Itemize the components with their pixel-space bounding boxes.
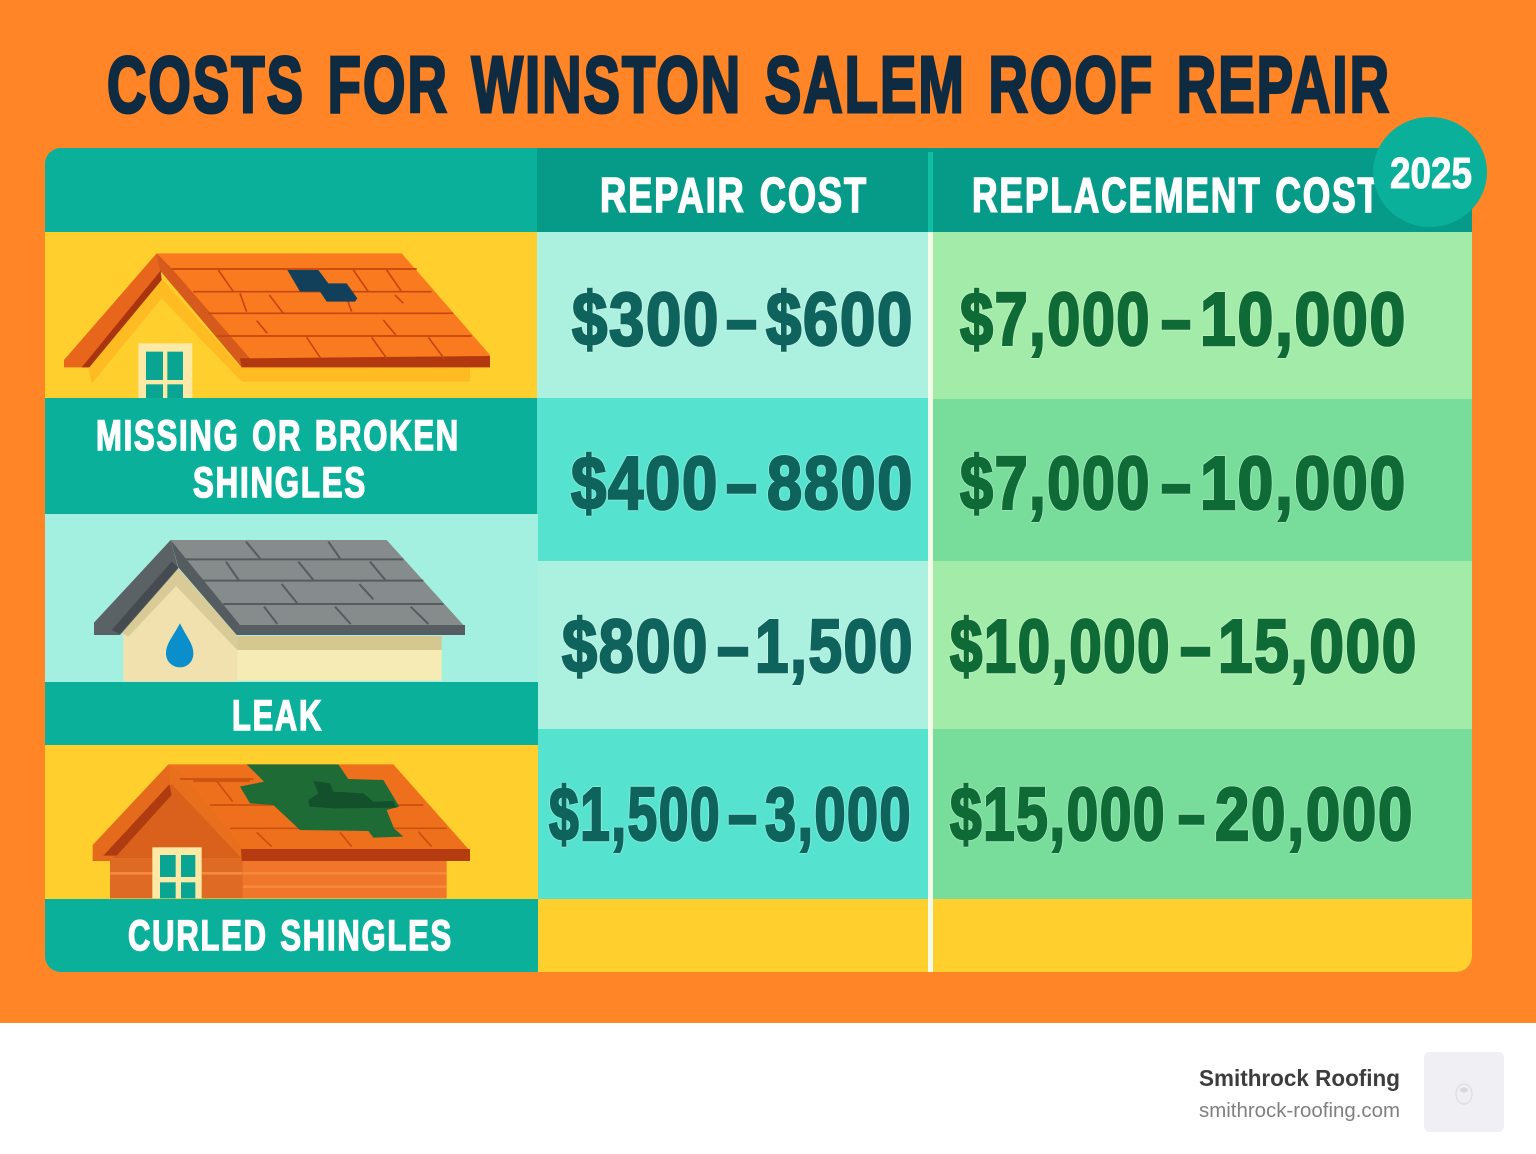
label: leak: LEAK <box>232 692 323 740</box>
value: $7,000–10,000: 10,000 <box>1200 441 1407 525</box>
panel: cost table <box>45 148 1472 972</box>
value: $7,000–10,000: $7,000 <box>960 277 1151 361</box>
value: $15,000–20,000: – <box>1178 772 1205 856</box>
label: curled shingles: CURLED SHINGLES <box>128 912 453 960</box>
value: $400–8800 <box>570 450 912 517</box>
icon: logo tile <box>1424 1052 1504 1132</box>
value: $300–$600: – <box>726 277 757 361</box>
repair cost column backgrounds <box>537 232 928 972</box>
header: repair cost: REPAIR COST <box>600 169 868 223</box>
brand url: smithrock-roofing.com <box>1199 1099 1400 1122</box>
value: $7,000–10,000: $7,000 <box>960 441 1151 525</box>
value: $1,500–3,000: – <box>728 772 757 856</box>
value: $400–8800: – <box>726 441 757 525</box>
value: $10,000–15,000: $10,000 <box>950 604 1171 688</box>
brand name: Smithrock Roofing <box>1199 1065 1400 1091</box>
value: $7,000–10,000 <box>958 450 1405 523</box>
value: $15,000–20,000: $15,000 <box>950 772 1166 856</box>
footer brand <box>1199 1052 1504 1132</box>
value: $15,000–20,000 <box>948 782 1412 854</box>
value: $10,000–15,000: 15,000 <box>1218 604 1418 688</box>
label: missing or broken shingles: MISSING OR BROKEN <box>96 412 460 460</box>
value: $10,000–15,000: – <box>1180 604 1211 688</box>
value: $800–1,500: $800 <box>562 604 709 688</box>
badge: 2025 <box>1373 117 1487 227</box>
value: $400–8800: 8800 <box>767 441 914 525</box>
value: $15,000–20,000: 20,000 <box>1215 772 1414 856</box>
value: $300–$600 <box>571 287 912 352</box>
row 3: curled shingles <box>45 745 538 972</box>
value: $800–1,500: 1,500 <box>755 604 914 688</box>
value: $1,500–3,000 <box>548 782 910 854</box>
value: $800–1,500 <box>561 614 912 686</box>
value: $1,500–3,000: 3,000 <box>765 772 912 856</box>
row 2: leak <box>45 514 538 745</box>
icon: orange roof with missing shingles <box>64 253 490 398</box>
value: $7,000–10,000: 10,000 <box>1200 277 1407 361</box>
value: $1,500–3,000: $1,500 <box>549 772 721 856</box>
value: $7,000–10,000 <box>959 287 1404 359</box>
value: $7,000–10,000: – <box>1161 441 1191 525</box>
badge: 2025: 2025 <box>1390 149 1472 198</box>
value: $800–1,500: – <box>717 604 749 688</box>
value: $7,000–10,000: – <box>1161 277 1191 361</box>
value: $400–8800: $400 <box>571 441 719 525</box>
table header row <box>45 148 1472 232</box>
label: shingles: SHINGLES <box>193 459 367 507</box>
value: $300–$600: $600 <box>766 277 914 361</box>
row 1: missing or broken shingles <box>45 232 537 514</box>
icon: brick house with mossy roof <box>93 764 470 898</box>
icon: grey roof house with water drop <box>94 540 465 682</box>
replacement cost values <box>950 277 1418 856</box>
value: $300–$600: $300 <box>572 277 720 361</box>
replacement cost column backgrounds <box>933 232 1472 972</box>
header: replacement cost: REPLACEMENT COST <box>972 169 1381 223</box>
repair cost values <box>549 277 914 856</box>
value: $10,000–15,000 <box>949 614 1416 686</box>
